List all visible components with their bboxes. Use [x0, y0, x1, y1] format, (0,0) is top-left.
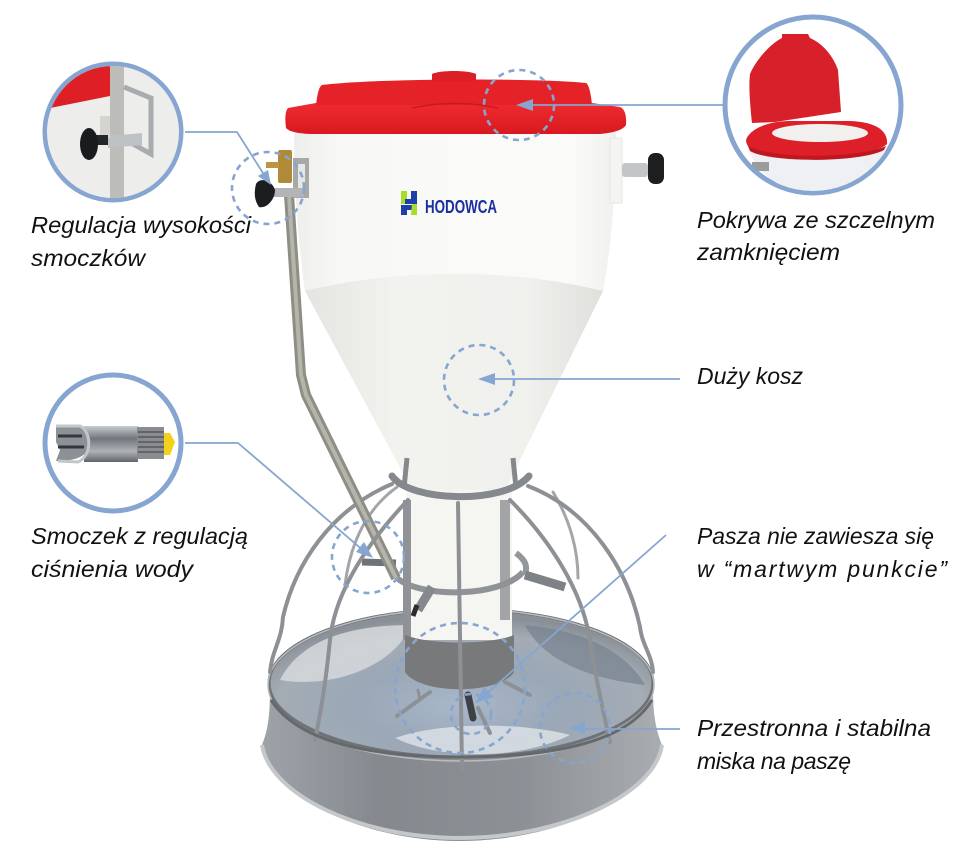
label: nipple: Smoczek z regulacją: [31, 523, 248, 549]
front wires: [315, 500, 408, 740]
dashed callout markers: [232, 70, 610, 763]
inset: water nipple: [45, 375, 181, 511]
pan interior: [270, 609, 652, 757]
outer wires: [270, 484, 392, 672]
right knob clamp: [610, 138, 622, 203]
hopper upper body: [294, 130, 616, 292]
label: lid: Pokrywa ze szczelnym: [697, 207, 935, 233]
lid top: [316, 79, 592, 105]
label: feed flow line 2: w “martwym punkcie”: [697, 556, 948, 582]
white tube: [406, 490, 512, 640]
logo: [401, 191, 497, 217]
logo: HODOWCA: [425, 197, 497, 217]
back wires: [345, 487, 397, 585]
label: large hopper: Duży kosz: [697, 363, 803, 389]
leader arrows: [185, 99, 723, 734]
lower ring and nipples: [397, 572, 523, 592]
pan rim front: [271, 700, 652, 757]
downtube pipe: [289, 195, 396, 578]
label: bowl: Przestronna i stabilna: [697, 715, 931, 741]
left valve bracket: [293, 158, 309, 198]
top ring: [404, 458, 516, 488]
label: height regulation: Regulacja wysokości: [31, 212, 252, 238]
lid brim: [285, 103, 626, 134]
grey sleeve: [405, 635, 514, 689]
agitator spokes: [397, 682, 530, 733]
inset: lid: [725, 17, 901, 193]
label: bowl line 2: miska na paszę: [697, 748, 851, 774]
metal pan outer wall: [262, 690, 662, 841]
label: height regulation line 2: smoczków: [31, 245, 146, 271]
label: feed flow: Pasza nie zawiesza się: [697, 523, 934, 549]
label: lid line 2: zamknięciem: [696, 239, 840, 265]
feeder product illustration: [255, 71, 664, 841]
hopper cone: [305, 274, 603, 490]
inset: height adjustment: [42, 62, 184, 202]
label: nipple line 2: ciśnienia wody: [31, 556, 195, 582]
